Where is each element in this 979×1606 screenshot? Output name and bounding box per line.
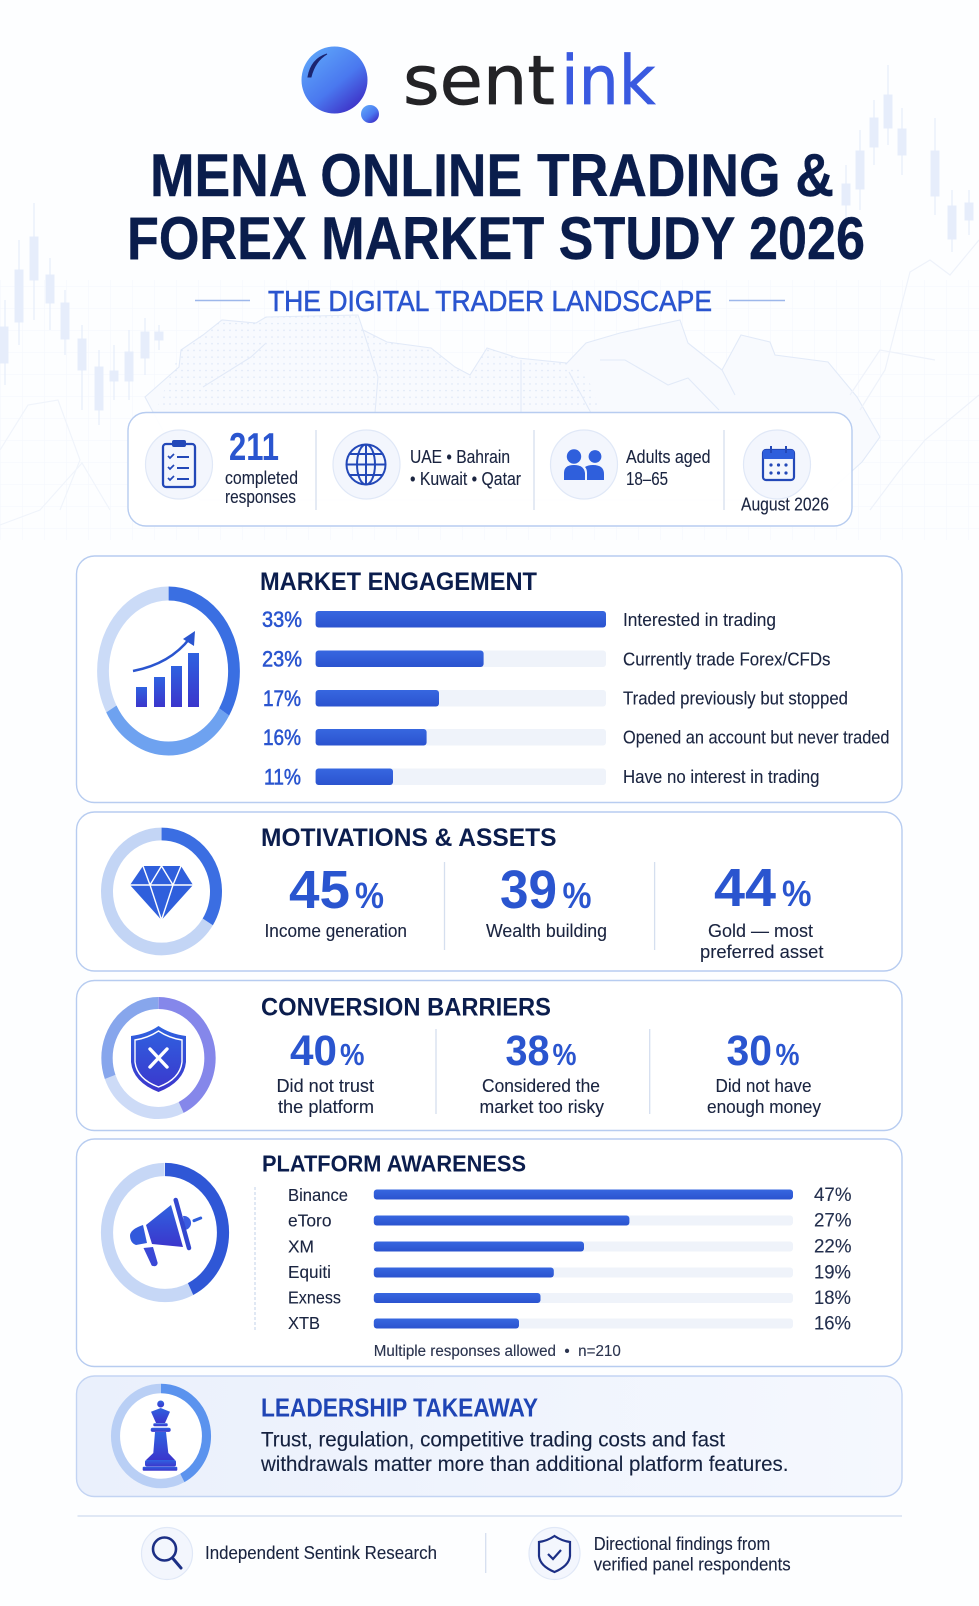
bar row: Exness	[288, 1287, 851, 1309]
heading: MARKET ENGAGEMENT	[260, 568, 537, 596]
bar row: XTB: XTB	[288, 1313, 320, 1333]
icon: diamond in ring	[107, 834, 216, 949]
bar row: eToro	[288, 1210, 852, 1232]
bar row: Equiti: 19%	[814, 1262, 851, 1284]
bar row: no interest: 11%	[264, 764, 301, 790]
stat: gold: %	[782, 873, 812, 914]
logo: Sentink	[302, 42, 656, 123]
text: independent research: Independent Sentink Research	[205, 1543, 437, 1563]
title: MENA ONLINE TRADING &	[150, 142, 834, 209]
bar row: Equiti: Equiti	[288, 1262, 331, 1282]
title	[127, 142, 865, 272]
stat: gold: preferred asset	[700, 942, 824, 962]
panel: market engagement	[76, 556, 902, 802]
stat: too risky: %	[552, 1037, 576, 1072]
subtitle: THE DIGITAL TRADER LANDSCAPE	[268, 286, 712, 318]
panel: study overview	[128, 412, 852, 526]
stat: too risky: Considered the	[482, 1076, 600, 1096]
bar row: Exness: 18%	[814, 1287, 851, 1309]
bar row: interested in trading	[262, 607, 776, 632]
icon: globe	[333, 430, 400, 499]
stat: not enough money	[707, 1027, 821, 1117]
bar row: traded previously: Traded previously but stopped	[623, 688, 848, 708]
title: FOREX MARKET STUDY 2026	[127, 205, 865, 272]
icon: logo orb	[302, 46, 379, 123]
stat: income generation: %	[355, 875, 384, 916]
stat: gold	[700, 858, 824, 962]
heading: CONVERSION BARRIERS	[261, 994, 551, 1022]
bar row: Equiti	[288, 1262, 851, 1284]
icon: growth chart in ring	[103, 594, 234, 748]
text: directional findings: Directional findings from	[594, 1534, 770, 1554]
icon: verified shield	[529, 1528, 580, 1580]
stat: not enough money: enough money	[707, 1097, 821, 1117]
wordmark: ink	[561, 42, 656, 121]
stat: income generation: 45	[289, 860, 350, 920]
body text: withdrawals matter more than additional platform features.	[260, 1453, 788, 1476]
text: countries	[410, 447, 521, 489]
bar row: Exness: Exness	[288, 1288, 341, 1308]
footer	[142, 1528, 791, 1580]
stat: gold: 44	[714, 858, 776, 918]
heading: LEADERSHIP TAKEAWAY	[261, 1392, 538, 1422]
bar row: XM: XM	[288, 1236, 314, 1256]
icon: people	[550, 430, 618, 499]
text: countries: • Kuwait • Qatar	[410, 469, 521, 489]
stat: completed responses: 211	[229, 426, 279, 469]
heading: MOTIVATIONS & ASSETS	[261, 824, 556, 852]
panel: platform awareness	[76, 1139, 902, 1366]
bar row: interested in trading: 33%	[262, 607, 302, 632]
stat: not enough money: %	[776, 1037, 800, 1072]
icon: clipboard	[146, 430, 212, 499]
panel: motivations and assets	[76, 812, 902, 971]
stat: wealth building: %	[562, 875, 592, 916]
panel: leadership takeaway	[76, 1376, 902, 1496]
icon: megaphone in ring	[107, 1170, 223, 1296]
stat: completed responses	[225, 426, 298, 507]
stat: wealth building: 39	[500, 860, 557, 920]
bar row: currently trade: Currently trade Forex/CFDs	[623, 650, 830, 670]
stat: did not trust: 40	[290, 1027, 337, 1075]
stat: too risky: market too risky	[480, 1097, 604, 1117]
text: age range	[626, 447, 710, 489]
bar row: XTB	[288, 1312, 851, 1334]
stat: income generation	[264, 860, 407, 941]
bar row: XM	[288, 1236, 852, 1258]
stat: gold: Gold — most	[708, 921, 813, 941]
bar row: currently trade	[262, 646, 830, 672]
bar row: opened account: Opened an account but never traded	[623, 728, 890, 748]
bar row: opened account	[263, 725, 890, 750]
stat: did not trust: Did not trust	[276, 1076, 374, 1096]
stat: not enough money: 30	[726, 1027, 772, 1075]
stat: income generation: Income generation	[264, 921, 407, 941]
bar row: no interest	[264, 764, 820, 790]
panel: conversion barriers	[76, 980, 902, 1130]
stat: not enough money: Did not have	[716, 1076, 812, 1096]
text: date: August 2026	[741, 494, 829, 514]
wordmark: sent	[403, 42, 555, 121]
body text: Trust, regulation, competitive trading costs and fast	[261, 1428, 725, 1452]
stat: completed responses: completed	[225, 468, 298, 488]
text: age range: 18–65	[626, 469, 668, 489]
bar row: opened account: 16%	[263, 725, 301, 750]
bar row: XM: 22%	[814, 1236, 852, 1258]
bar row: currently trade: 23%	[262, 646, 302, 672]
footnote: Multiple responses allowed • n=210	[374, 1343, 621, 1360]
text: countries: UAE • Bahrain	[410, 447, 510, 467]
stat: wealth building	[486, 860, 607, 941]
text: directional findings: verified panel respondents	[594, 1555, 791, 1575]
text: directional findings	[594, 1534, 791, 1575]
stat: too risky	[480, 1027, 604, 1117]
body text	[260, 1428, 788, 1476]
heading: PLATFORM AWARENESS	[262, 1150, 526, 1176]
text: age range: Adults aged	[626, 447, 710, 467]
icon: calendar	[744, 430, 810, 499]
icon: magnifier	[142, 1528, 192, 1580]
stat: did not trust	[276, 1027, 374, 1117]
bar row: interested in trading: Interested in trading	[623, 610, 776, 630]
stat: completed responses: responses	[225, 487, 296, 507]
bar row: eToro: eToro	[288, 1210, 332, 1230]
bar row: traded previously	[263, 686, 848, 711]
stat: did not trust: the platform	[278, 1097, 374, 1117]
stat: did not trust: %	[340, 1037, 364, 1072]
bar row: Binance: 47%	[814, 1184, 852, 1206]
bar row: XTB: 16%	[814, 1312, 851, 1334]
icon: shield in ring	[107, 1003, 210, 1113]
bar row: Binance: Binance	[288, 1185, 348, 1205]
bar row: no interest: Have no interest in trading	[623, 767, 820, 787]
bar row: eToro: 27%	[814, 1210, 852, 1232]
stat: wealth building: Wealth building	[486, 921, 607, 941]
bar row: Binance	[288, 1184, 852, 1206]
wordmark	[403, 42, 656, 121]
icon: chess king in ring	[116, 1388, 206, 1484]
bar row: traded previously: 17%	[263, 686, 301, 711]
stat: too risky: 38	[506, 1027, 550, 1075]
